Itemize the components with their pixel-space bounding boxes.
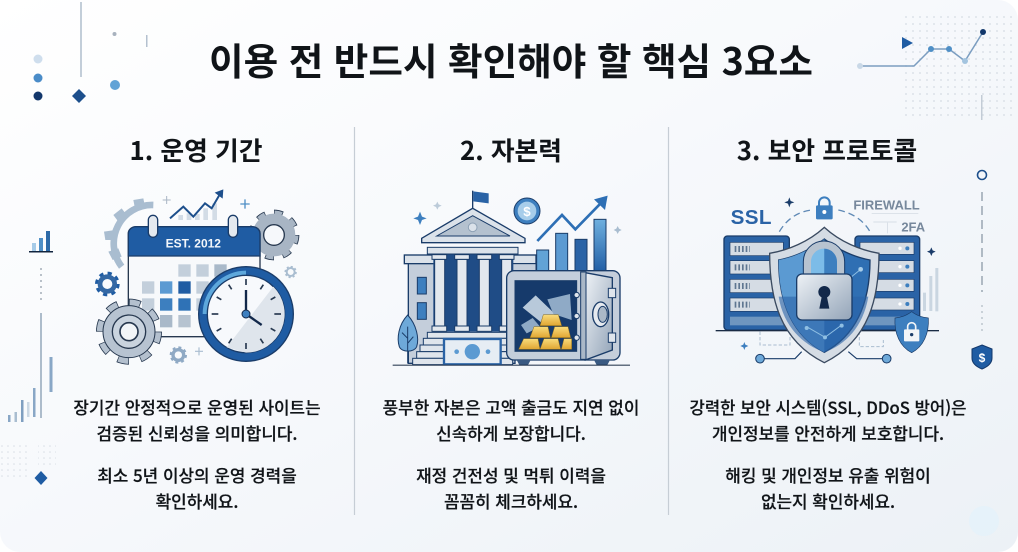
decoration: top-right chart [857,15,1015,120]
main padlock [797,241,852,320]
panel: 2 capital strength [383,131,639,513]
labels: FIREWALL [853,197,920,212]
text: 2 description: 재정 건전성 및 먹튀 이력을 [416,462,606,487]
text: 1 description: 검증된 신뢰성을 의미합니다. [97,420,297,445]
text: 1 description [73,394,321,513]
labels [731,197,926,234]
heading: 3: 3. 보안 프로토콜 [737,131,917,168]
text: 3 description [690,394,966,513]
trend arrow [170,189,223,220]
small gears [97,267,296,362]
server left [724,236,789,330]
small shield [895,312,928,353]
icon: bank, safe and growth chart [393,191,630,366]
text: 2 description: 꼼꼼히 체크하세요. [444,488,578,513]
icon: calendar, clock and gears [97,189,296,362]
decoration: top-left dots and lines [34,2,148,103]
text: 3 description: 없는지 확인하세요. [761,488,895,513]
padlock small [816,197,833,219]
decoration: left bar chart and lines [0,231,56,485]
calendar [128,215,260,337]
bank [404,208,536,365]
text: 3 description: 해킹 및 개인정보 유출 위험이 [725,462,931,487]
flag [473,191,489,209]
panel: 3 security protocol [690,131,966,513]
text: 1 description: 확인하세요. [156,488,238,513]
gear: bottom left [101,304,157,360]
text: 2 description: 신속하게 보장합니다. [436,420,586,445]
text: 2 description [383,394,639,513]
text: 2 description: 풍부한 자본은 고액 출금도 지연 없이 [383,394,639,419]
title: 이용 전 반드시 확인해야 할 핵심 3요소 [209,31,813,86]
text: 3 description: 개인정보를 안전하게 보호합니다. [712,420,944,445]
coin: $ [523,204,531,219]
text: 1 description: 장기간 안정적으로 운영된 사이트는 [73,394,321,419]
panel: 1 operating period [73,131,321,513]
main shield [770,227,879,363]
icon: shield, lock and servers [716,197,939,363]
coin [514,198,540,224]
server right [855,236,920,330]
column dividers [354,127,668,515]
clock [199,267,293,361]
safe [507,271,620,365]
heading: 1: 1. 운영 기간 [129,131,263,168]
calendar: EST. 2012 [166,237,221,251]
labels: 2FA [901,219,926,234]
decoration: right dashed line and shield [969,170,999,536]
gear: top right [253,214,295,256]
text: 3 description: 강력한 보안 시스템(SSL, DDoS 방어)은 [690,394,966,419]
banknote [444,339,501,364]
decoration: right dashed line and shield: $ [979,351,986,365]
text: 1 description: 최소 5년 이상의 운영 경력을 [97,462,297,487]
labels: SSL [731,206,772,229]
heading: 2: 2. 자본력 [460,131,562,168]
tree [398,315,418,363]
bars and arrow [537,196,608,273]
